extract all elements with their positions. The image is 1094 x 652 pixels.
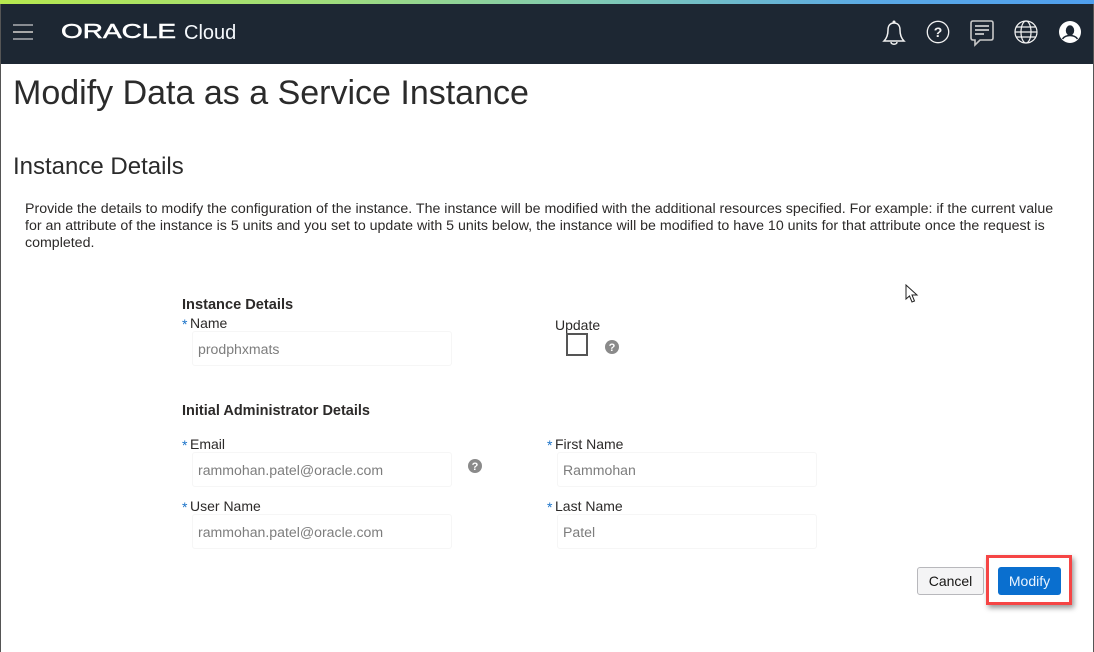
- icon: bell: [882, 20, 906, 45]
- icon: mouse cursor: [906, 284, 918, 303]
- logo: Oracle Cloud: [61, 21, 236, 44]
- button: Cancel: [917, 567, 984, 595]
- field: Email: *: [182, 437, 187, 453]
- icon: chat: [970, 20, 994, 47]
- field: Update: Update: [555, 317, 600, 333]
- input: User Name: rammohan.patel@oracle.com: [198, 524, 383, 540]
- description paragraph: completed.: [25, 235, 94, 251]
- page title: Modify Data as a Service Instance: [13, 74, 529, 112]
- icon: help: [926, 20, 950, 44]
- field: User Name: User Name: [190, 498, 261, 514]
- input: Email: rammohan.patel@oracle.com: [198, 462, 383, 478]
- navigation bar: [1, 4, 1093, 64]
- form heading: Initial Administrator Details: Initial Administrator Details: [182, 403, 370, 419]
- icon: hamburger menu: [13, 24, 33, 40]
- description paragraph: for an attribute of the instance is 5 units and you set to update with 5 units below, the instance will be modified to have 10 units for that attribute once the request is: [25, 218, 1045, 234]
- input: Last Name: [557, 514, 817, 549]
- description paragraph: [25, 201, 1053, 251]
- top gradient strip: [0, 0, 1094, 4]
- field: Email: Email: [190, 436, 225, 452]
- icon: help badge: [605, 340, 619, 354]
- section heading: Instance Details: Instance Details: [13, 153, 184, 180]
- input: First Name: Rammohan: [563, 462, 636, 478]
- checkbox: [566, 333, 588, 356]
- input: User Name: [192, 514, 452, 549]
- button: Cancel: Cancel: [929, 573, 972, 589]
- field: Last Name: Last Name: [555, 498, 623, 514]
- button: Modify: [998, 567, 1061, 595]
- description paragraph: Provide the details to modify the configuration of the instance. The instance will be modified with the additional resources specified. For example: if the current value: [25, 201, 1053, 217]
- input: Name: [192, 331, 452, 366]
- icon: user avatar: [1059, 21, 1081, 43]
- field: User Name: [182, 498, 452, 549]
- field: Name: [182, 315, 452, 366]
- field: Update: [555, 317, 619, 356]
- icon: globe: [1014, 20, 1038, 44]
- input: Name: prodphxmats: [198, 341, 279, 357]
- input: Email: [192, 452, 452, 487]
- field: Last Name: *: [547, 499, 552, 515]
- logo: Oracle Cloud: Cloud: [184, 22, 236, 44]
- field: First Name: First Name: [555, 436, 623, 452]
- button: Modify: Modify: [1009, 573, 1050, 589]
- callout: red highlight box: [986, 555, 1072, 605]
- input: First Name: [557, 452, 817, 487]
- field: Last Name: [547, 498, 817, 549]
- field: Name: *: [182, 316, 187, 332]
- field: First Name: [547, 436, 817, 487]
- input: Last Name: Patel: [563, 524, 595, 540]
- field: User Name: *: [182, 499, 187, 515]
- field: First Name: *: [547, 437, 552, 453]
- logo: Oracle Cloud: ORACLE: [61, 21, 176, 43]
- field: Email: [182, 436, 482, 487]
- icon: help badge: [468, 459, 482, 473]
- icon: help badge: ?: [609, 342, 616, 354]
- form heading: Instance Details: Instance Details: [182, 297, 293, 313]
- icon: help: ?: [934, 24, 942, 40]
- icon: help badge: ?: [472, 461, 479, 473]
- field: Name: Name: [190, 315, 227, 331]
